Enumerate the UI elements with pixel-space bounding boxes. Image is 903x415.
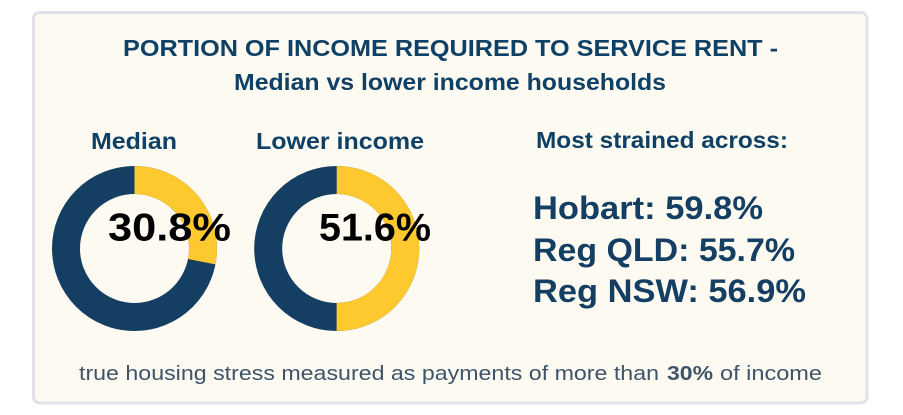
label: lower income: Lower income [256,128,424,154]
stat: Hobart: Hobart: 59.8% [533,190,763,226]
donut chart: lower income 51.6% [268,180,405,317]
donut chart: median 30.8% [66,180,203,317]
panel: lower income donut [256,128,431,317]
heading: Median vs lower income households [234,69,666,95]
stat: Regional NSW: Reg NSW: 56.9% [533,273,806,309]
heading [123,35,778,95]
footnote [79,363,822,385]
footnote: true housing stress measured as payments of more than [79,363,659,385]
value: 30.8%: 30.8% [108,206,231,250]
panel: median donut [66,128,231,317]
footnote: of income [720,363,822,385]
heading: PORTION OF INCOME REQUIRED TO SERVICE RENT - [123,35,778,61]
subheading: Most strained across: [536,127,788,153]
value: 51.6%: 51.6% [319,206,431,250]
stat: Regional QLD: Reg QLD: 55.7% [533,232,795,268]
label: median: Median [91,128,177,154]
panel: most strained list [533,127,806,309]
footnote: 30% [667,363,713,385]
